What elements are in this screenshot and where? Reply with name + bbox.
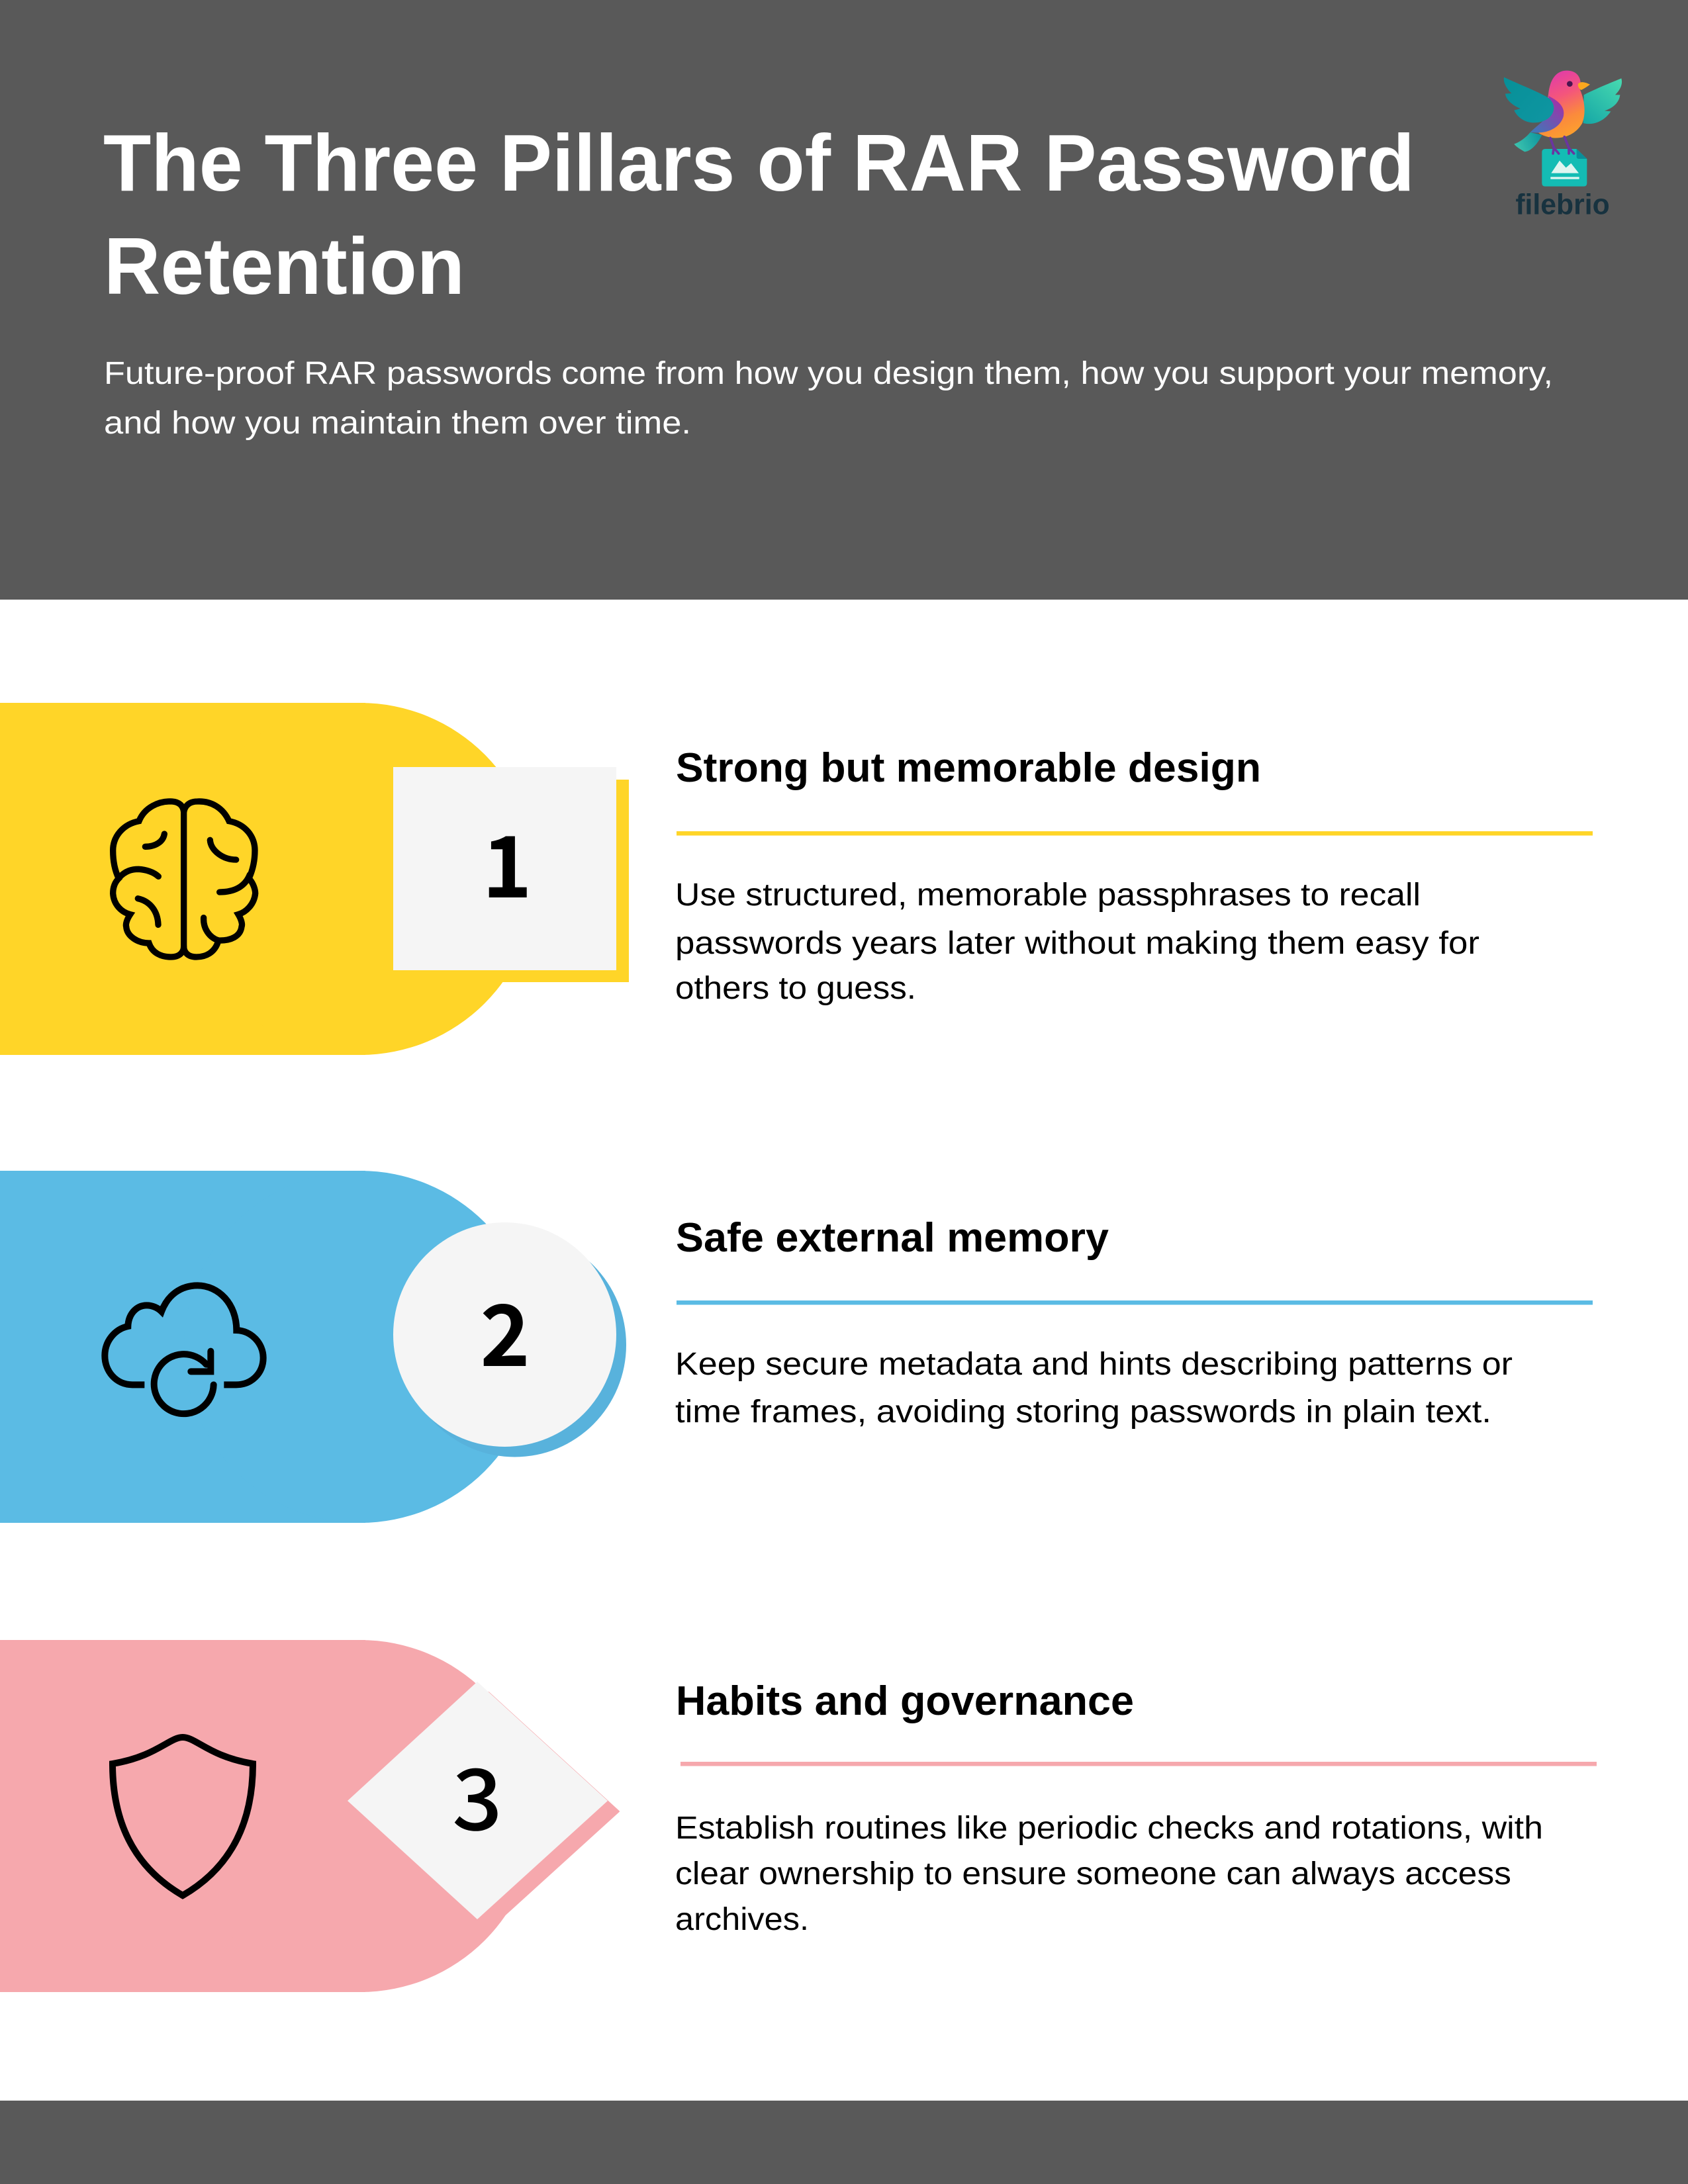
- pillar 2 panel: [0, 1171, 1593, 1523]
- body 1: Use structured, memorable passphrases to recall: [675, 878, 1421, 913]
- blue tab: [0, 1171, 536, 1523]
- logo: filebrio bird: filebrio: [1515, 188, 1610, 220]
- number diamond 3: [348, 1682, 619, 1930]
- footer band: [0, 2101, 1688, 2184]
- body 1: passwords years later without making them easy for: [675, 926, 1479, 961]
- number card 1: [393, 767, 629, 982]
- heading 2: Safe external memory: [676, 1215, 1109, 1261]
- body 3: clear ownership to ensure someone can always access: [675, 1856, 1511, 1891]
- pillar 3 panel: [0, 1640, 1597, 1992]
- subtitle: and how you maintain them over time.: [104, 406, 691, 441]
- icon: shield: [113, 1737, 253, 1895]
- body 2: time frames, avoiding storing passwords in plain text.: [675, 1394, 1491, 1430]
- body 3: [675, 1811, 1543, 1937]
- subtitle: Future-proof RAR passwords come from how you design them, how you support your memory,: [104, 356, 1553, 391]
- title: [103, 118, 1415, 311]
- body 1: [675, 878, 1479, 1006]
- logo: filebrio bird: [1504, 71, 1622, 220]
- title: The Three Pillars of RAR Password: [103, 118, 1415, 208]
- subtitle: [104, 356, 1553, 441]
- number badge 2: [393, 1222, 626, 1457]
- body 2: [675, 1347, 1513, 1430]
- pink tab: [0, 1640, 536, 1992]
- heading 1: Strong but memorable design: [676, 745, 1261, 791]
- yellow tab: [0, 703, 536, 1055]
- number card 1: 1: [482, 799, 532, 922]
- body 3: archives.: [675, 1902, 809, 1937]
- icon: brain: [113, 801, 256, 957]
- heading 3: Habits and governance: [676, 1678, 1134, 1724]
- title: Retention: [104, 221, 465, 311]
- number diamond 3: 3: [452, 1732, 502, 1854]
- number badge 2: 2: [480, 1268, 530, 1390]
- icon: cloud sync: [105, 1285, 263, 1414]
- body 2: Keep secure metadata and hints describing patterns or: [675, 1347, 1513, 1382]
- body 3: Establish routines like periodic checks and rotations, with: [675, 1811, 1543, 1846]
- body 1: others to guess.: [675, 971, 916, 1006]
- pillar 1 panel: [0, 703, 1593, 1055]
- header band: [0, 0, 1688, 600]
